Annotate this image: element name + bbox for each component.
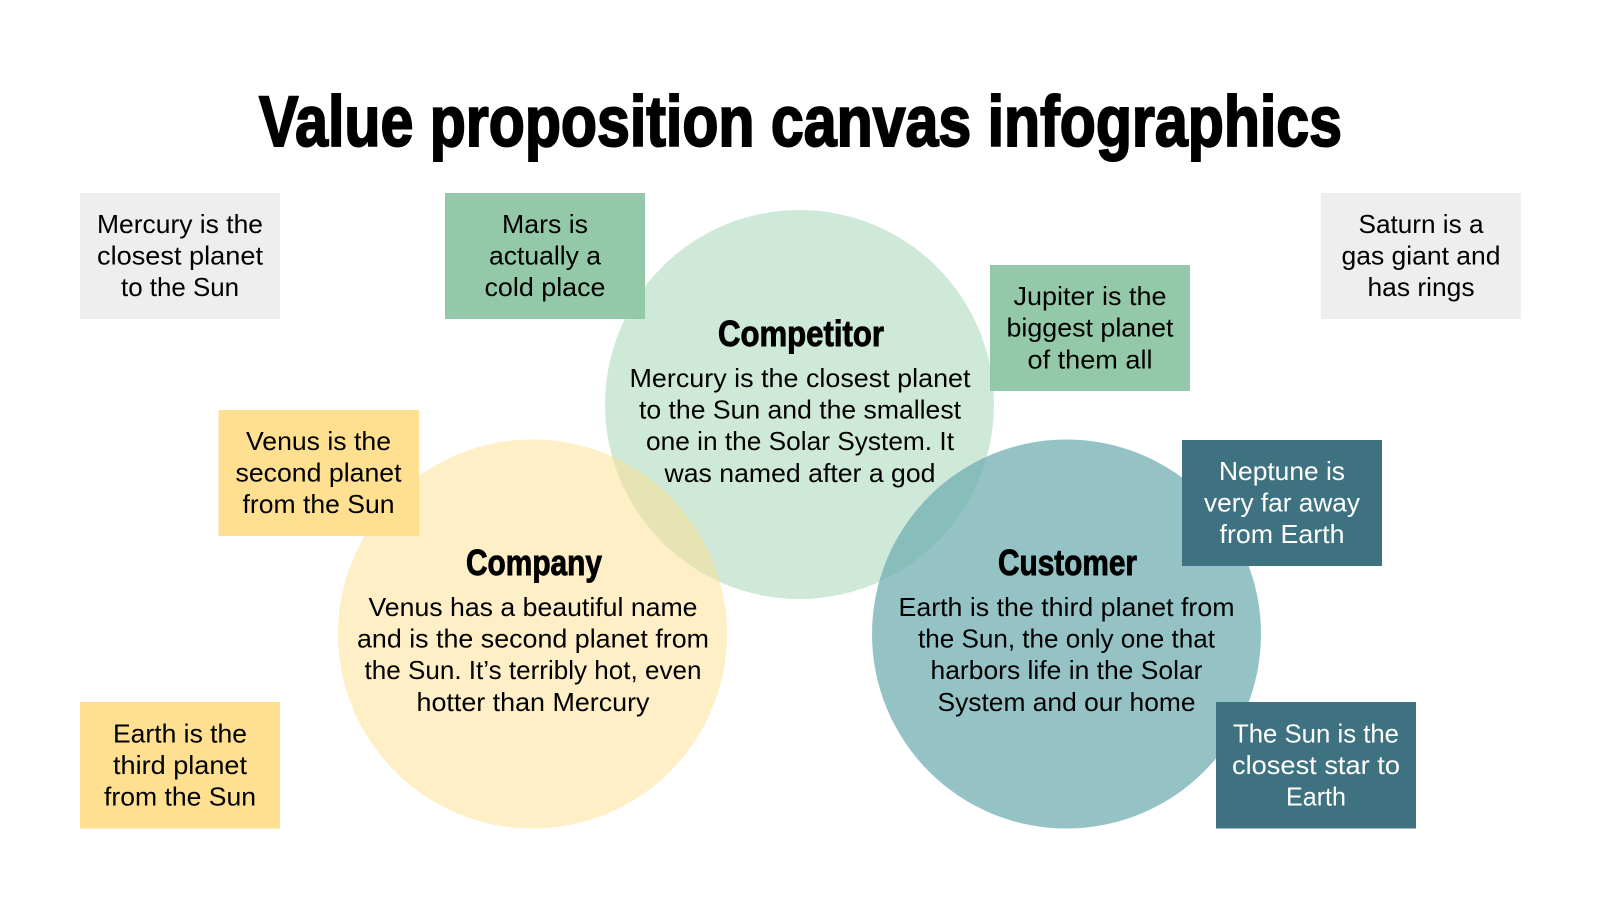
note: Neptune (1182, 440, 1382, 566)
note: Venus: second planet (236, 458, 402, 488)
text block: customer description: System and our home (938, 687, 1196, 717)
note: Mars: actually a (489, 241, 602, 271)
title: Value proposition canvas infographics (259, 83, 1342, 162)
heading: competitor: Competitor (718, 313, 884, 354)
note: Saturn: has rings (1368, 272, 1474, 302)
panel: competitor text (630, 313, 971, 488)
text block: competitor description: Mercury is the closest planet (630, 363, 971, 393)
note: Mars (445, 193, 645, 319)
text block: company description: and is the second planet from (357, 624, 709, 654)
note: The Sun: Earth (1286, 782, 1346, 812)
note: Saturn: gas giant and (1342, 241, 1500, 271)
text block: customer description (898, 592, 1234, 717)
note: Earth: from the Sun (104, 782, 256, 812)
note: Jupiter: of them all (1028, 345, 1152, 375)
note: Mars: cold place (484, 272, 606, 302)
text block: company description: Venus has a beautiful name (368, 592, 698, 622)
note: Neptune: Neptune is (1219, 456, 1345, 486)
note: Mercury (80, 193, 280, 319)
note: The Sun: closest star to (1232, 750, 1400, 780)
text block: company description: hotter than Mercury (416, 687, 650, 717)
text block: customer description: Earth is the third planet from (898, 592, 1234, 622)
text block: customer description: the Sun, the only one that (918, 624, 1216, 654)
note: Earth: Earth is the (113, 718, 247, 748)
note: Jupiter: biggest planet (1006, 313, 1174, 343)
heading: customer: Customer (998, 542, 1137, 583)
note: Jupiter (990, 265, 1190, 391)
text block: company description (357, 592, 709, 717)
text block: customer description: harbors life in the Solar (930, 655, 1203, 685)
text block: competitor description (630, 363, 971, 488)
note: Saturn: Saturn is a (1358, 209, 1484, 239)
panel: customer text (898, 542, 1234, 717)
note: Mercury: to the Sun (121, 272, 239, 302)
note: Jupiter: Jupiter is the (1014, 281, 1166, 311)
heading: company: Company (466, 542, 602, 583)
note: Mars: Mars is (502, 209, 588, 239)
note: Neptune: from Earth (1220, 519, 1344, 549)
note: The Sun: The Sun is the (1233, 718, 1399, 748)
note: Earth (80, 702, 280, 828)
note: Venus: from the Sun (242, 489, 394, 519)
text block: competitor description: to the Sun and the smallest (639, 395, 962, 425)
note: Neptune: very far away (1204, 488, 1360, 518)
circle: competitor (605, 210, 994, 599)
text block: competitor description: was named after a god (663, 458, 936, 488)
panel: company text (357, 542, 709, 717)
circle: customer (872, 440, 1261, 828)
text block: company description: the Sun. It’s terribly hot, even (364, 655, 702, 685)
note: Mercury: Mercury is the (97, 209, 263, 239)
note: Venus: Venus is the (246, 426, 391, 456)
circle: company (338, 440, 727, 828)
text block: competitor description: one in the Solar System. It (646, 426, 955, 456)
note: Saturn (1321, 193, 1521, 319)
note: Venus (218, 410, 419, 536)
note: Earth: third planet (113, 750, 248, 780)
note: Mercury: closest planet (97, 241, 264, 271)
note: The Sun (1216, 702, 1416, 828)
